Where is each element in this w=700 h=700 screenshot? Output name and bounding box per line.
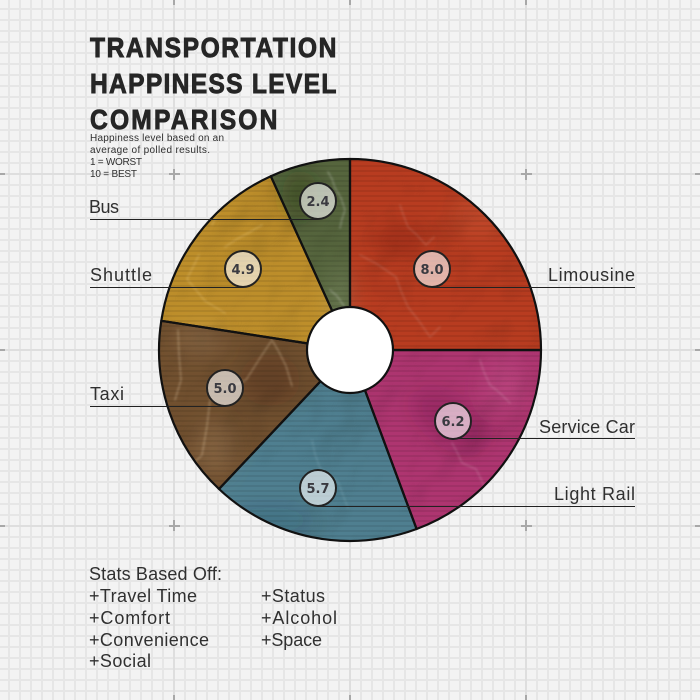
callout: Light Rail: Light Rail	[554, 484, 635, 504]
callout: Bus: 2.4	[306, 195, 330, 210]
callout: Limousine: 8.0	[420, 263, 444, 278]
stats list: +Comfort	[89, 608, 170, 628]
callout: Shuttle: 4.9	[231, 263, 255, 278]
callout: Light Rail: 5.7	[306, 482, 330, 497]
subtitle: scale explanation: average of polled results.	[90, 145, 210, 156]
title	[90, 32, 336, 135]
callout: Taxi	[90, 370, 243, 406]
title: COMPARISON	[90, 104, 277, 135]
stats list: +Travel Time	[89, 586, 197, 606]
title: TRANSPORTATION	[90, 32, 336, 63]
callout: Service Car: 6.2	[441, 415, 465, 430]
callout: Service Car: Service Car	[539, 417, 635, 437]
stats list: +Status	[261, 586, 325, 606]
stats list: +Convenience	[89, 630, 209, 650]
callout: Taxi: Taxi	[90, 384, 124, 404]
title: HAPPINESS LEVEL	[90, 68, 336, 99]
paper-textured wedges	[159, 159, 541, 541]
stats list: +Alcohol	[261, 608, 337, 628]
callout: Limousine: Limousine	[548, 265, 635, 285]
callout: Taxi: 5.0	[213, 382, 237, 397]
stats list: +Space	[261, 630, 322, 650]
subtitle: scale explanation: 1 = WORST	[90, 157, 142, 168]
stats list: +Social	[89, 651, 151, 671]
callout: Shuttle	[90, 251, 261, 288]
stats list: Stats Based Off:	[89, 564, 222, 584]
callout: Shuttle: Shuttle	[90, 265, 152, 285]
stats list	[89, 564, 337, 671]
callout: Light Rail	[300, 470, 635, 506]
donut chart: happiness by transport type	[159, 159, 541, 541]
callout: Service Car	[435, 403, 635, 439]
subtitle: scale explanation	[90, 133, 224, 180]
subtitle: scale explanation: Happiness level based on an	[90, 133, 224, 144]
callout: Bus: Bus	[89, 197, 119, 217]
callout: Limousine	[414, 251, 635, 288]
paper creases	[175, 170, 527, 532]
subtitle: scale explanation: 10 = BEST	[90, 169, 137, 180]
callout: Bus	[89, 183, 336, 220]
